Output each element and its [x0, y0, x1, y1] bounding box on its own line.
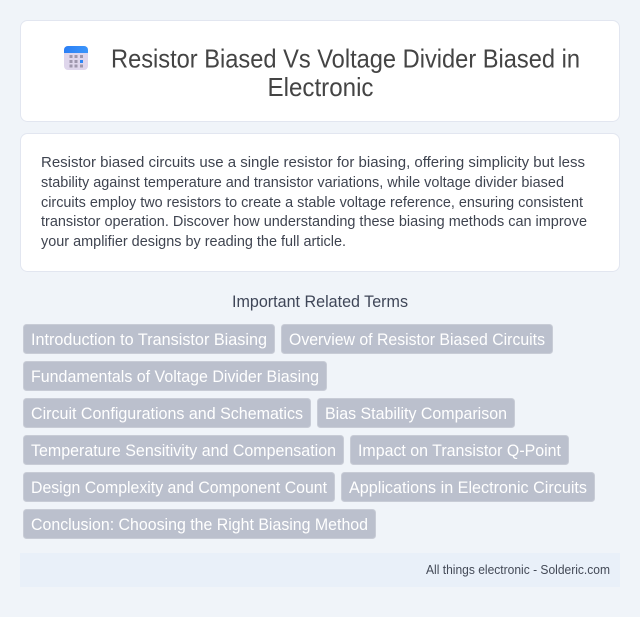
tag	[342, 472, 594, 502]
tag	[24, 324, 274, 354]
tag	[24, 510, 376, 538]
tag: Applications in Electronic Circuits	[349, 478, 587, 497]
tag	[24, 436, 344, 464]
tag: Circuit Configurations and Schematics	[31, 404, 303, 423]
title: Electronic	[268, 72, 374, 102]
panel: summary	[20, 134, 620, 272]
tag: Impact on Transistor Q-Point	[358, 441, 561, 460]
summary text: transistor operation. Discover how understanding these biasing methods can improve	[41, 213, 587, 230]
heading: important related terms: Important Related Terms	[232, 293, 408, 311]
tag	[318, 398, 514, 428]
summary text: Resistor biased circuits use a single resistor for biasing, offering simplicity but less	[41, 154, 585, 171]
tag: Introduction to Transistor Biasing	[31, 330, 267, 349]
tag: Conclusion: Choosing the Right Biasing Method	[31, 515, 368, 534]
summary text: stability against temperature and transistor variations, while voltage divider biased	[41, 174, 564, 191]
tag	[24, 398, 310, 428]
tag: Design Complexity and Component Count	[31, 478, 327, 497]
tag: Overview of Resistor Biased Circuits	[289, 330, 545, 349]
tag: Temperature Sensitivity and Compensation	[31, 441, 336, 460]
header panel	[20, 20, 620, 122]
tag list	[24, 324, 594, 538]
tag	[350, 436, 568, 464]
tag	[24, 362, 326, 390]
summary text: circuits employ two resistors to create a stable voltage reference, ensuring consistent	[41, 194, 584, 211]
title: Resistor Biased Vs Voltage Divider Biased in	[111, 44, 580, 74]
tag: Fundamentals of Voltage Divider Biasing	[31, 367, 319, 386]
footer text: All things electronic - Solderic.com	[426, 563, 610, 577]
tag: Bias Stability Comparison	[325, 404, 507, 423]
summary text: your amplifier designs by reading the full article.	[41, 233, 346, 250]
icon: calendar	[64, 46, 88, 70]
footer	[20, 553, 620, 587]
tag	[24, 472, 334, 502]
tag	[282, 324, 552, 354]
